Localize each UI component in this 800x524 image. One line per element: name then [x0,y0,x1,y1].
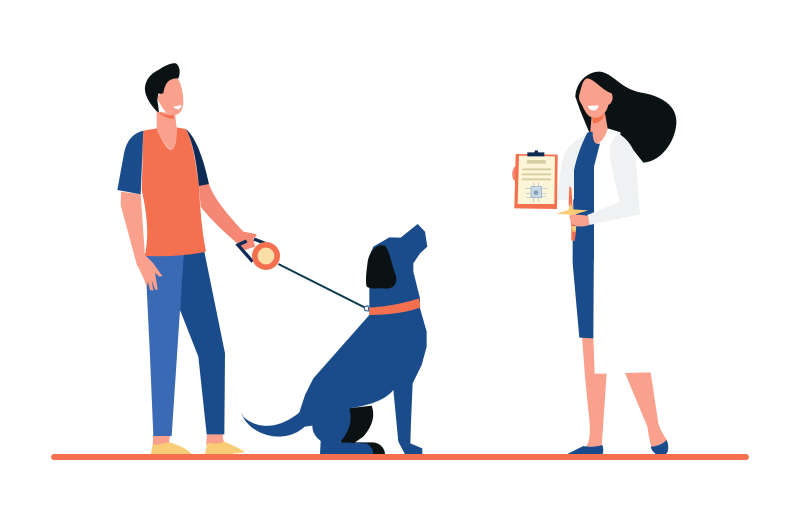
man [117,63,257,455]
retractable leash handle [238,239,280,270]
dog collar [369,298,420,315]
man left hand [134,250,162,291]
syringe and hand [556,186,589,241]
vet upper body [512,72,676,260]
dog ear [366,245,396,289]
ground line [51,454,749,460]
leash [278,264,365,308]
leash clip [364,306,369,311]
dog and leash [238,224,427,456]
dog [241,224,427,456]
vet legs, shoes and lower dress [563,230,668,456]
clipboard [514,150,558,209]
veterinarian [512,72,676,456]
man legs and shoes [145,250,245,455]
man upper body [117,63,257,267]
